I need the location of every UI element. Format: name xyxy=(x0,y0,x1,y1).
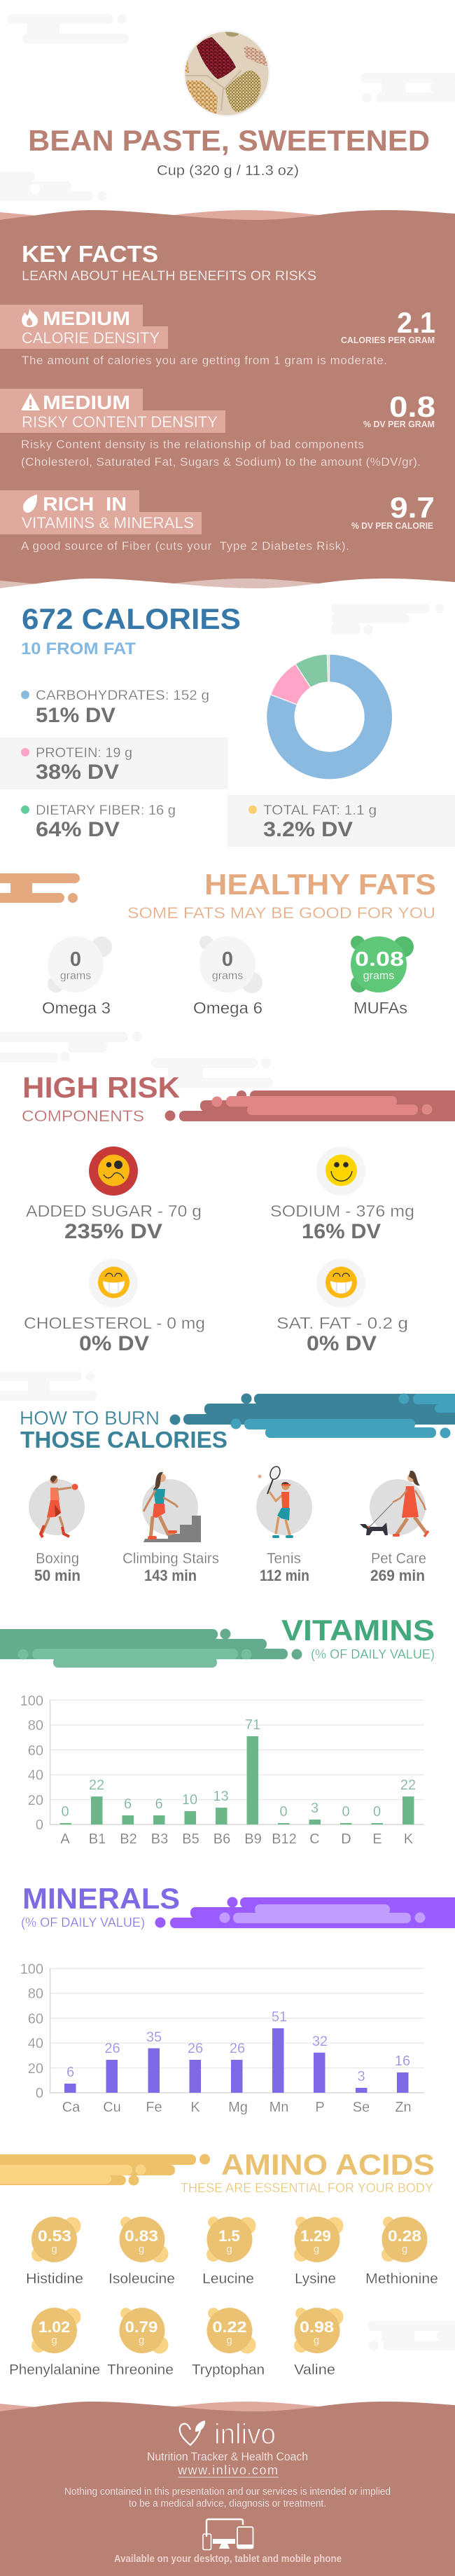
bar chart: vitamins: 40 xyxy=(28,1768,43,1783)
amino acid: valine: g xyxy=(314,2334,319,2346)
disclaimer: to be a medical advice, diagnosis or treatment. xyxy=(129,2498,326,2509)
amino acid: valine: Valine xyxy=(294,2362,335,2378)
fact: risky content density: Risky Content density is the relationship of bad components xyxy=(21,438,364,451)
legend: carbohydrates xyxy=(21,688,209,727)
subheading: amino acids: THESE ARE ESSENTIAL FOR YOUR BODY xyxy=(181,2181,433,2195)
amino acid: leucine: 1.5 xyxy=(218,2227,240,2245)
fact: risky content density xyxy=(0,389,435,469)
bar chart: minerals: 3 xyxy=(357,2069,365,2084)
activity: boxing: Boxing xyxy=(36,1551,79,1567)
bar chart: vitamins: 100 xyxy=(20,1694,43,1709)
bar chart: vitamins: 13 xyxy=(213,1789,229,1804)
decoration: high risk blob xyxy=(165,1090,455,1121)
bar chart: vitamins: E xyxy=(372,1831,382,1847)
bar chart: minerals: 51 xyxy=(272,2009,287,2025)
icon: inlivo heart logo xyxy=(180,2421,205,2445)
legend: carbohydrates: 51% DV xyxy=(36,704,115,727)
amino acid: phenylalanine: 1.02 xyxy=(38,2318,70,2336)
bar chart: vitamins: A xyxy=(60,1831,70,1847)
food photo: beans in sacks xyxy=(183,30,270,117)
decoration: burn blob xyxy=(169,1394,455,1439)
fact: risky content density: % DV PER GRAM xyxy=(363,419,435,429)
panel: footer xyxy=(0,2402,455,2576)
bar chart: vitamins: 22 xyxy=(400,1778,416,1793)
bar chart: vitamins: D xyxy=(341,1831,351,1847)
activity: boxing: 50 min xyxy=(34,1567,80,1584)
heading: amino acids: AMINO ACIDS xyxy=(221,2148,435,2181)
amino acid: methionine: Methionine xyxy=(365,2271,438,2287)
decoration: amino acids blob xyxy=(0,2154,210,2185)
activity: pet care: Pet Care xyxy=(371,1551,426,1567)
amino acid: leucine: Leucine xyxy=(202,2271,254,2287)
amino acid: methionine xyxy=(365,2217,438,2287)
activity: boxing xyxy=(29,1476,85,1584)
risk: cholesterol: CHOLESTEROL - 0 mg xyxy=(24,1314,205,1332)
legend: dietary fiber: 64% DV xyxy=(36,818,120,841)
amino acid: lysine: g xyxy=(314,2243,319,2255)
risk: cholesterol: 0% DV xyxy=(79,1332,149,1355)
amino acid: isoleucine: g xyxy=(139,2243,144,2255)
legend: total fat: 3.2% DV xyxy=(263,818,353,841)
legend: dietary fiber: DIETARY FIBER: 16 g xyxy=(36,803,176,818)
legend: carbohydrates: CARBOHYDRATES: 152 g xyxy=(36,688,209,703)
panel: key facts xyxy=(0,210,455,594)
amino acid: methionine: 0.28 xyxy=(388,2227,421,2245)
bar chart: minerals: P xyxy=(315,2100,325,2115)
tagline: Nutrition Tracker & Health Coach xyxy=(147,2450,308,2463)
heading: healthy fats: HEALTHY FATS xyxy=(204,868,436,901)
background cloud: top right xyxy=(360,73,455,102)
stat: omega 3 xyxy=(42,936,112,1017)
bar chart: vitamins: 80 xyxy=(28,1718,43,1733)
risk: added sugar: 235% DV xyxy=(64,1220,162,1243)
risk: added sugar: ADDED SUGAR - 70 g xyxy=(26,1202,202,1220)
activity: pet care xyxy=(360,1471,428,1584)
subheading: components: COMPONENTS xyxy=(22,1107,144,1125)
decoration: minerals blob xyxy=(155,1897,455,1928)
amino acid: tryptophan: Tryptophan xyxy=(192,2362,265,2378)
bar chart: vitamins: 0 xyxy=(373,1804,381,1820)
bar chart: minerals: 20 xyxy=(28,2061,43,2077)
bar chart: minerals: Mg xyxy=(228,2100,248,2115)
amino acid: isoleucine: Isoleucine xyxy=(108,2271,175,2287)
stat: omega 6: grams xyxy=(212,970,243,982)
bar chart: minerals: Zn xyxy=(395,2100,412,2115)
bar chart: minerals: 60 xyxy=(28,2011,43,2027)
amino acid: lysine xyxy=(294,2217,343,2287)
fact: calorie density: CALORIES PER GRAM xyxy=(341,335,435,345)
fact: calorie density: The amount of calories you are getting from 1 gram is moderate. xyxy=(22,354,387,367)
background cloud: behind high risk xyxy=(151,1058,273,1088)
bar chart: vitamins: 71 xyxy=(245,1717,260,1733)
background cloud: burn section xyxy=(0,1371,97,1401)
legend: protein: 38% DV xyxy=(36,761,119,784)
icon: smiling face xyxy=(316,1147,365,1196)
bar chart: minerals: 35 xyxy=(146,2030,162,2045)
bar chart: minerals: Cu xyxy=(103,2100,121,2115)
bar chart: minerals: 100 xyxy=(20,1962,43,1977)
background cloud: top left xyxy=(7,14,129,43)
amino acid: tryptophan xyxy=(192,2308,265,2378)
stat: omega 3: Omega 3 xyxy=(42,999,111,1017)
bar chart: vitamins: B5 xyxy=(182,1831,200,1847)
icon: grinning face xyxy=(316,1259,365,1308)
bar chart: minerals: 0 xyxy=(36,2086,43,2101)
bar chart: minerals: 26 xyxy=(104,2041,120,2056)
bar chart: vitamins: B9 xyxy=(244,1831,262,1847)
bar chart: vitamins: 60 xyxy=(28,1743,43,1759)
availability note: Available on your desktop, tablet and mobile phone xyxy=(114,2553,342,2565)
activity: tennis: Tenis xyxy=(267,1551,301,1567)
bar chart: minerals: 6 xyxy=(66,2065,74,2080)
website link: www.inlivo.com xyxy=(177,2463,278,2477)
bar chart: vitamins: 0 xyxy=(61,1804,69,1820)
risk: added sugar xyxy=(26,1147,202,1243)
risk: saturated fat: SAT. FAT - 0.2 g xyxy=(276,1314,408,1332)
stat: mufas: grams xyxy=(363,970,394,982)
background cloud: below fats xyxy=(0,1032,142,1062)
icon: woman walking dog xyxy=(360,1471,428,1537)
bar chart: minerals: 26 xyxy=(188,2041,203,2056)
risk: sodium: SODIUM - 376 mg xyxy=(270,1202,414,1220)
background cloud: calories xyxy=(331,604,444,635)
activity: tennis: 112 min xyxy=(260,1567,309,1584)
bar chart: minerals: Se xyxy=(353,2100,370,2115)
fact: rich in vitamins and minerals xyxy=(0,490,435,553)
stat: omega 3: grams xyxy=(60,970,91,982)
amino acid: phenylalanine: g xyxy=(51,2334,57,2346)
fact: calorie density: 2.1 xyxy=(397,306,435,339)
bar chart: minerals: 26 xyxy=(230,2041,245,2056)
icon: warning triangle xyxy=(21,393,40,410)
icon: sad face xyxy=(89,1147,138,1196)
amino acid: histidine xyxy=(26,2217,83,2287)
heading: key facts: KEY FACTS xyxy=(22,241,158,267)
risk: cholesterol xyxy=(24,1259,205,1355)
chart: macronutrient donut xyxy=(267,654,393,780)
subheading: vitamins daily value: (% OF DAILY VALUE) xyxy=(311,1647,435,1661)
bar chart: minerals: K xyxy=(190,2100,200,2115)
amino acid: threonine: 0.79 xyxy=(125,2318,158,2336)
background cloud: amino acids xyxy=(368,2321,455,2350)
fact: rich in vitamins and minerals: A good source of Fiber (cuts your Type 2 Diabetes Risk). xyxy=(21,539,349,553)
bar chart: vitamins: 10 xyxy=(182,1792,197,1808)
amino acid: isoleucine xyxy=(108,2217,175,2287)
stat: mufas xyxy=(351,936,414,1017)
bar chart: minerals: Fe xyxy=(146,2100,162,2115)
fact: calorie density xyxy=(0,305,435,367)
risk: saturated fat: 0% DV xyxy=(307,1332,377,1355)
fact: rich in vitamins and minerals: % DV PER CALORIE xyxy=(351,520,433,531)
amino acid: leucine: g xyxy=(226,2243,232,2255)
fact: risky content density: (Cholesterol, Saturated Fat, Sugars & Sodium) to the amount (%DV/gr). xyxy=(21,455,421,469)
amino acid: isoleucine: 0.83 xyxy=(125,2227,158,2245)
bar chart: vitamins: B1 xyxy=(89,1831,106,1847)
amino acid: threonine: Threonine xyxy=(107,2362,174,2378)
activity: climbing stairs xyxy=(122,1472,219,1584)
stat: mufas: 0.08 xyxy=(355,948,404,971)
serving size: Cup (320 g / 11.3 oz) xyxy=(157,163,299,179)
bar chart: minerals: 80 xyxy=(28,1986,43,2002)
fact: calorie density: CALORIE DENSITY xyxy=(22,329,160,347)
bar chart: vitamins: K xyxy=(404,1831,414,1847)
title: BEAN PASTE, SWEETENED xyxy=(28,124,430,157)
fact: risky content density: 0.8 xyxy=(389,390,435,423)
disclaimer: Nothing contained in this presentation and our services is intended or implied xyxy=(64,2486,391,2498)
bar chart: vitamins: 0 xyxy=(279,1804,288,1820)
fact: rich in vitamins and minerals: VITAMINS & MINERALS xyxy=(22,514,194,532)
amino acid: histidine: g xyxy=(51,2243,57,2255)
heading: how to burn: HOW TO BURN xyxy=(20,1407,160,1429)
decoration: healthy fats blob xyxy=(0,873,80,903)
bar chart: vitamins: 0 xyxy=(36,1817,43,1833)
bar chart: minerals: 16 xyxy=(395,2054,410,2069)
bar chart: vitamins: B3 xyxy=(151,1831,168,1847)
activity: climbing stairs: Climbing Stairs xyxy=(122,1551,219,1567)
subheading: key facts: LEARN ABOUT HEALTH BENEFITS OR RISKS xyxy=(22,269,316,284)
stat: omega 6 xyxy=(193,936,262,1017)
icon: tennis player xyxy=(256,1465,312,1538)
bar chart: vitamins: B6 xyxy=(214,1831,230,1847)
bar chart: vitamins: B12 xyxy=(272,1831,297,1847)
heading: vitamins: VITAMINS xyxy=(281,1614,435,1647)
background cloud: left of subtitle xyxy=(0,172,107,201)
heading: minerals: MINERALS xyxy=(22,1882,180,1915)
amino acid: valine xyxy=(294,2308,343,2378)
amino acid: phenylalanine xyxy=(9,2308,100,2378)
stat: mufas: MUFAs xyxy=(354,999,407,1017)
bar chart: vitamins: 20 xyxy=(28,1793,43,1808)
legend: protein: PROTEIN: 19 g xyxy=(36,746,132,761)
amino acid: methionine: g xyxy=(402,2243,407,2255)
amino acid: threonine xyxy=(107,2308,174,2378)
heading: high risk: HIGH RISK xyxy=(22,1071,180,1104)
bar chart: minerals: 32 xyxy=(312,2034,328,2049)
amino acid: leucine xyxy=(202,2217,256,2287)
stat: omega 6: 0 xyxy=(222,948,233,971)
legend: protein xyxy=(0,738,228,789)
icon: flame xyxy=(22,308,38,327)
icon: desktop, tablet and phone xyxy=(203,2519,253,2549)
heading: calories: 672 CALORIES xyxy=(22,602,241,635)
legend: dietary fiber xyxy=(21,803,176,841)
fact: risky content density: MEDIUM xyxy=(43,392,130,413)
bar chart: vitamins xyxy=(20,1694,424,1847)
activity: pet care: 269 min xyxy=(370,1567,425,1584)
fact: risky content density: RISKY CONTENT DENSITY xyxy=(22,413,218,431)
bar chart: minerals: Mn xyxy=(270,2100,288,2115)
bar chart: minerals: Ca xyxy=(62,2100,80,2115)
legend: total fat xyxy=(227,795,455,847)
icon: leaf xyxy=(23,494,37,513)
activity: climbing stairs: 143 min xyxy=(144,1567,197,1584)
bar chart: vitamins: 0 xyxy=(342,1804,350,1820)
bar chart: vitamins: B2 xyxy=(120,1831,137,1847)
bar chart: vitamins: C xyxy=(309,1831,320,1847)
risk: sodium: 16% DV xyxy=(302,1220,381,1243)
fact: rich in vitamins and minerals: RICH IN xyxy=(43,493,127,515)
activity: tennis xyxy=(256,1465,312,1584)
amino acid: valine: 0.98 xyxy=(300,2318,334,2336)
icon: woman on stairs xyxy=(142,1472,201,1542)
bar chart: minerals xyxy=(20,1962,424,2115)
icon: boxer xyxy=(29,1476,85,1537)
brand name: inlivo xyxy=(214,2418,276,2450)
amino acid: tryptophan: 0.22 xyxy=(213,2318,246,2336)
amino acid: tryptophan: g xyxy=(226,2334,232,2346)
legend: total fat: TOTAL FAT: 1.1 g xyxy=(263,803,377,818)
bar chart: vitamins: 6 xyxy=(155,1796,163,1812)
subheading: healthy fats: SOME FATS MAY BE GOOD FOR YOU xyxy=(127,904,435,922)
decoration: vitamins blob xyxy=(0,1629,302,1668)
amino acid: lysine: 1.29 xyxy=(300,2227,331,2245)
icon: grinning face xyxy=(89,1259,138,1308)
bar chart: vitamins: 22 xyxy=(89,1778,104,1793)
fact: rich in vitamins and minerals: 9.7 xyxy=(390,491,435,524)
amino acid: lysine: Lysine xyxy=(295,2271,336,2287)
amino acid: histidine: 0.53 xyxy=(38,2227,71,2245)
risk: saturated fat xyxy=(276,1259,408,1355)
bar chart: vitamins: 3 xyxy=(311,1801,318,1816)
stat: omega 6: Omega 6 xyxy=(193,999,262,1017)
amino acid: phenylalanine: Phenylalanine xyxy=(9,2362,100,2378)
amino acid: histidine: Histidine xyxy=(26,2271,83,2287)
heading: those calories: THOSE CALORIES xyxy=(20,1427,227,1453)
stat: omega 3: 0 xyxy=(70,948,81,971)
disclaimer xyxy=(64,2486,391,2509)
subheading: minerals daily value: (% OF DAILY VALUE) xyxy=(21,1916,145,1930)
subheading: calories from fat: 10 FROM FAT xyxy=(21,639,136,658)
bar chart: minerals: 40 xyxy=(28,2036,43,2051)
amino acid: threonine: g xyxy=(139,2334,144,2346)
risk: sodium xyxy=(270,1147,414,1243)
fact: calorie density: MEDIUM xyxy=(43,307,130,329)
bar chart: vitamins: 6 xyxy=(124,1796,132,1812)
